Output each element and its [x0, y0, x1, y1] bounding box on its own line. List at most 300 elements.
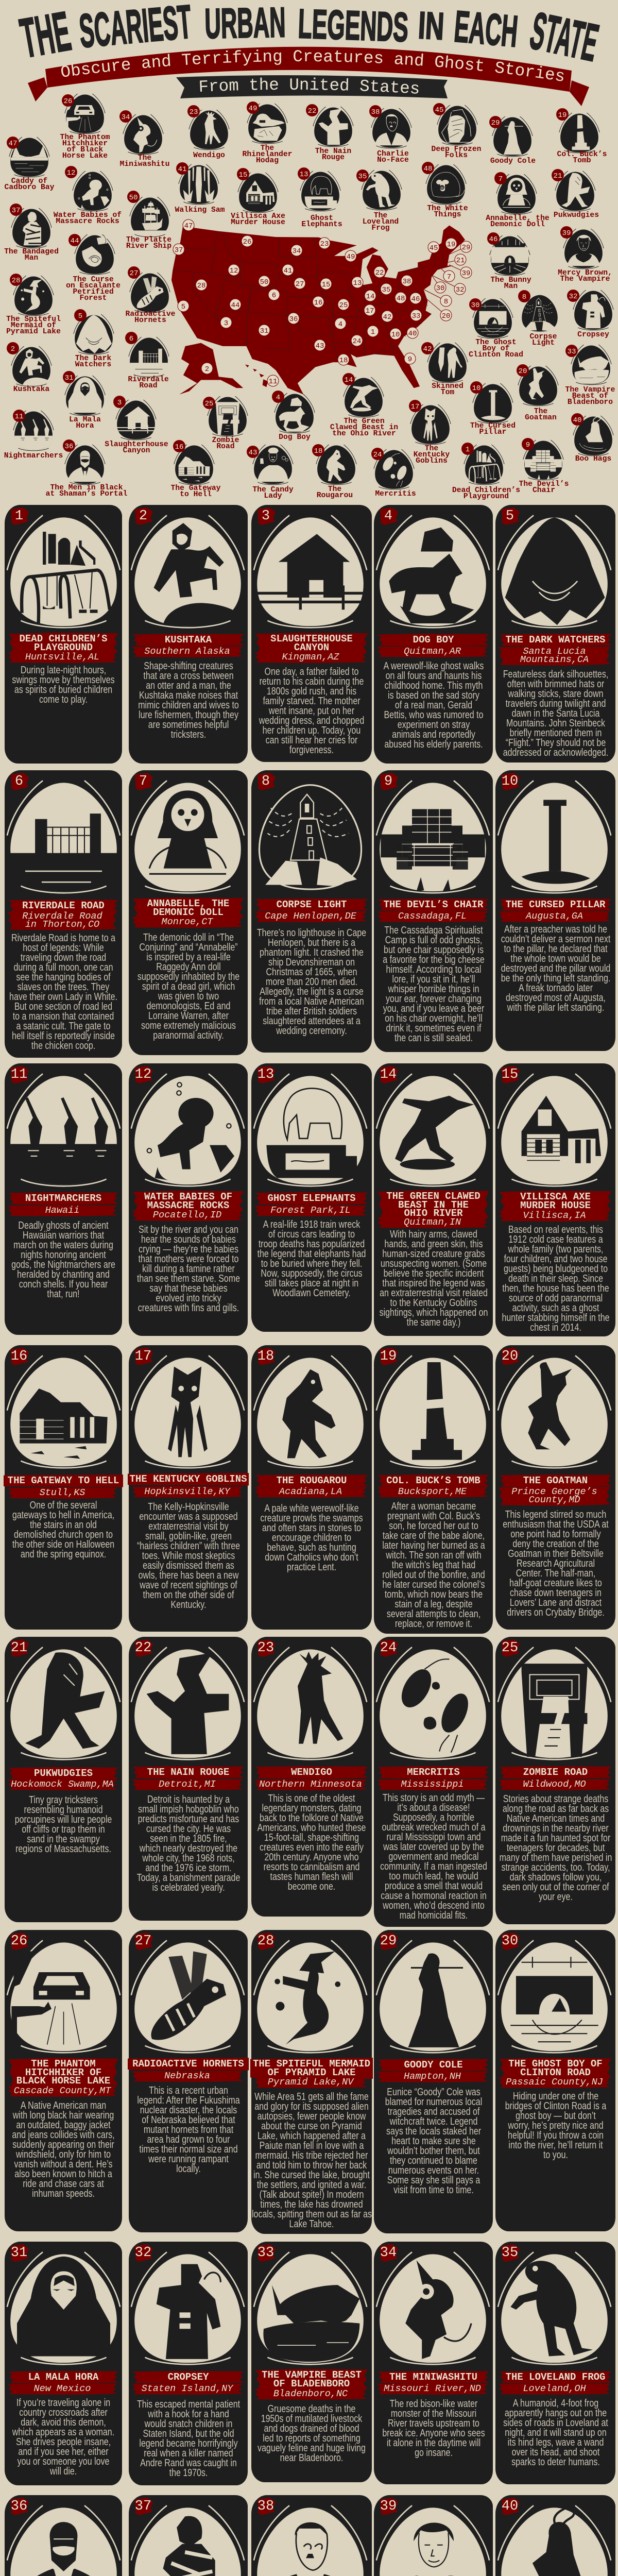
card 18: 18: [258, 1349, 274, 1364]
card 33: OF BLADENBORO: [273, 2378, 350, 2389]
mini: 35 Loveland Frog: Loveland: [363, 218, 399, 226]
mini: 7 Annabelle: Demonic Doll: [490, 221, 545, 229]
card 10: Augusta,GA: [526, 911, 583, 922]
card 28: and told him to throw her back: [256, 2160, 367, 2171]
card 4: experiment on stray: [397, 719, 470, 731]
card 11: march on the waters during: [13, 1240, 113, 1251]
mini: 17 Kentucky Goblins: Goblins: [416, 457, 448, 465]
mini: 25 Zombie Road: [203, 396, 248, 451]
mini: 43 Candy Lady: The Candy: [252, 486, 294, 494]
card 26: 26: [11, 1934, 27, 1949]
card 9: himself. According to local: [386, 963, 481, 975]
mini: 19 Col. Buck's Tomb: [556, 108, 607, 165]
map markers: 45: [430, 244, 438, 252]
card 13: of circus cars leading to: [268, 1228, 355, 1240]
card 15: guests) being bludgeoned to: [504, 1263, 607, 1275]
card 1: swings move by themselves: [12, 674, 115, 685]
card 18: and often stars in stories to: [262, 1522, 361, 1533]
card 10: [495, 770, 615, 1051]
card 9: but one chair supposedly is: [384, 944, 483, 955]
mini: 22 Nain Rouge: The Nain: [315, 147, 351, 156]
card 7: Raggedy Ann doll: [156, 961, 220, 973]
mini: 36 Men in Black: 36: [65, 443, 73, 451]
card 33: 1950s of mutilated livestock: [261, 2413, 362, 2425]
card 25: Stories about strange deaths: [503, 1793, 608, 1804]
mini: 39 Mercy Brown: [558, 226, 612, 283]
card 32: the 1970s.: [169, 2467, 208, 2478]
mini: 5 Dark Watchers: Watchers: [75, 361, 111, 369]
card 3: went insane, put on her: [269, 705, 354, 716]
mini: 47 Caddy: 47: [9, 140, 17, 148]
card 30: to you.: [543, 2149, 568, 2161]
card 15: MURDER HOUSE: [520, 1199, 591, 1211]
card 31: and if you see her, either: [18, 2446, 109, 2458]
card 28: THE SPITEFUL MERMAID: [253, 2058, 370, 2070]
card 15: VILLISCA AXE: [520, 1191, 591, 1202]
mini: 23 Wendigo: 23: [190, 108, 198, 116]
card 15: then, the house has been the: [502, 1283, 609, 1294]
mini: 11 Nightmarchers: [4, 410, 63, 460]
mini: 22 Nain Rouge: Rouge: [322, 154, 345, 162]
card 28: mermaid. His tribe rejected her: [255, 2149, 368, 2161]
card 31: [5, 2242, 122, 2485]
card 6: Riverdale Road is home to a: [11, 933, 115, 944]
card 27: 27: [135, 1934, 151, 1949]
card 19: he later cursed the colonel’s: [382, 1579, 485, 1590]
header and map illustration: [4, 0, 615, 501]
card 6: see the hanging bodies of: [16, 972, 111, 983]
mini: 9 Devil's Chair: The Devil’s: [519, 480, 569, 488]
card 14: With hairy arms, clawed: [390, 1228, 477, 1240]
mini: 30 Ghost Boy: [469, 298, 523, 359]
card 12: creatures with fins and gills.: [138, 1302, 239, 1314]
mini: 29 Goody Cole: [489, 116, 536, 165]
card 9: the can is still sealed.: [394, 1032, 473, 1044]
card 28: about the curse on Pyramid: [261, 2121, 362, 2132]
map markers: 1: [371, 328, 375, 336]
card 30: bridges of Clinton Road is a: [505, 2100, 606, 2111]
mini: 23 Wendigo: Wendigo: [193, 151, 225, 160]
card 15: four children, and two house: [504, 1253, 607, 1264]
mini: 26 Phantom Hitchhiker: of Black: [67, 146, 103, 154]
mini: 7 Annabelle: Annabelle, the: [486, 214, 550, 223]
card 17: Hopkinsville,KY: [144, 1486, 230, 1497]
card 14: sightings, which happened on: [379, 1307, 488, 1318]
card 13: GHOST ELEPHANTS: [267, 1193, 356, 1204]
card 10: destroyed most of Augusta,: [506, 992, 605, 1004]
card 22: 22: [135, 1640, 151, 1656]
card 22: whole city, the 1968 riots,: [142, 1853, 234, 1864]
mini: 30 Ghost Boy: Clinton Road: [469, 351, 523, 359]
card 3: return to his cabin during the: [260, 676, 364, 687]
card 7: 7: [139, 774, 147, 789]
card 23: back to the folklore of Native: [260, 1812, 364, 1824]
card 27: This is a recent urban: [149, 2084, 228, 2096]
card 10: After a preacher was told he: [504, 923, 607, 935]
mini: 35 Loveland Frog: The: [374, 212, 387, 220]
card 28: 28: [258, 1934, 274, 1949]
mini: 20 Goatman: 20: [519, 367, 527, 376]
card 12: 12: [135, 1067, 151, 1082]
map markers: 43: [316, 342, 324, 350]
card 12: kill during a famine rather: [142, 1263, 234, 1275]
map markers: 11: [269, 378, 277, 386]
mini: 1 Dead Children's Playground: 1: [466, 446, 470, 454]
card 1: During late-night hours,: [21, 665, 106, 676]
card 5: THE DARK WATCHERS: [506, 634, 605, 646]
mini: 48 White Things: 48: [424, 165, 432, 173]
card 16: demolished church open to: [14, 1529, 113, 1540]
card 32: legend became horrifyingly: [139, 2438, 237, 2449]
card 24: mad homicidal fits.: [399, 1909, 468, 1921]
card 22: is celebrated yearly.: [152, 1882, 225, 1893]
card 29: visit from time to time.: [393, 2184, 473, 2196]
mini: 9 Devil's Chair: 9: [526, 441, 530, 449]
map markers: 6: [272, 292, 276, 300]
mini: 36 Men in Black: The Men in Black: [50, 484, 123, 492]
card 21: porcupines will lure people: [15, 1814, 112, 1825]
card 38: 38: [258, 2499, 274, 2514]
card 14: believe the specific incident: [383, 1267, 484, 1279]
card 19: Bucksport,ME: [398, 1486, 467, 1497]
card 8: Henlopen, but there is a: [268, 937, 355, 948]
card 13: Woodlawn Cemetery.: [272, 1287, 351, 1298]
card 40: [495, 2495, 615, 2576]
card 6: traveling down the road: [21, 952, 106, 963]
card 29: Eunice “Goody” Cole was: [387, 2087, 480, 2098]
card 7: Conjuring” and “Annabelle”: [139, 942, 237, 953]
mini: 29 Goody Cole: 29: [491, 119, 500, 127]
card 13: A real-life 1918 train wreck: [263, 1219, 360, 1230]
card 15: 15: [502, 1067, 518, 1082]
mini: 48 White Things: Things: [434, 211, 461, 219]
card 18: encourage children to: [272, 1532, 351, 1544]
card 9: on his chair overnight, he’ll: [385, 1013, 482, 1024]
mini: 12 Water Babies: [54, 166, 122, 226]
card 23: creatures even into the early: [260, 1841, 364, 1853]
mini: 33 Vampire Beast: Beast of: [572, 392, 608, 400]
card 23: tastes human flesh will: [270, 1871, 353, 1883]
mini: 44 Escalante: Forest: [80, 294, 107, 302]
card 2: KUSHTAKA: [165, 634, 212, 646]
card 23: 20th century. Anyone who: [265, 1852, 358, 1863]
mini: 43 Candy Lady: 43: [249, 449, 257, 457]
card 29: numerous events on her.: [388, 2165, 479, 2176]
mini: 32 Cropsey: Cropsey: [577, 331, 609, 339]
mini: 30 Ghost Boy: Boy of: [483, 345, 510, 353]
card 12: say that these babies: [149, 1283, 227, 1294]
card 34: 34: [380, 2245, 397, 2261]
card 7: some extremely malicious: [141, 1020, 236, 1031]
card 22: and the 1976 ice storm.: [145, 1862, 231, 1873]
card 20: 20: [502, 1349, 518, 1364]
card 20: enthusiasm that the USDA at: [503, 1519, 608, 1530]
map markers: 34: [293, 247, 301, 256]
card 11: heralded by chanting and: [17, 1268, 110, 1280]
mini: 17 Kentucky Goblins: The: [425, 445, 438, 453]
mini: 18 Rougarou: [312, 444, 356, 500]
card 6: RIVERDALE ROAD: [22, 900, 105, 911]
mini: 31 La Mala Hora: 31: [65, 374, 73, 382]
card 29: they continued to blame: [390, 2155, 477, 2166]
card 24: community. If a man ingested: [380, 1861, 487, 1872]
card 18: behave, such as hunting: [267, 1541, 356, 1553]
card 12: Pocatello,ID: [153, 1210, 221, 1221]
card 9: 9: [384, 774, 392, 789]
mini: 50 Platte River Ship: The Platte: [126, 236, 171, 244]
mini: 20 Goatman: [517, 364, 558, 422]
card 5: addressed or acknowledged.: [503, 747, 608, 758]
card 35: sides of roads in Loveland at: [503, 2417, 608, 2429]
mini: 13 Ghost Elephants: [298, 167, 342, 229]
card 12: crying — they’re the babies: [139, 1244, 238, 1255]
card 11: gods, the Nightmarchers are: [11, 1259, 115, 1270]
card 16: One of the several: [30, 1499, 97, 1511]
mini: 5 Dark Watchers: The Dark: [75, 354, 111, 363]
card 4: DOG BOY: [413, 634, 454, 646]
card 7: The demonic doll in “The: [143, 931, 234, 943]
card 3: forgiveness.: [289, 744, 334, 755]
map markers: 16: [314, 299, 322, 307]
card 30: helpful! If you throw a coin: [508, 2130, 603, 2141]
mini: 31 La Mala Hora: La Mala: [69, 416, 101, 424]
card 18: A pale white werewolf-like: [264, 1502, 359, 1514]
mini: 15 Villisca: Villisca Axe: [231, 212, 285, 221]
card 28: times, the lake has drowned: [260, 2199, 363, 2210]
card 8: slaughtered attendees at a: [263, 1015, 360, 1026]
card 35: night, and it will stand up on: [505, 2427, 606, 2438]
title: [16, 0, 603, 73]
card 32: real when a killer named: [144, 2447, 233, 2459]
card 6: have their own Lady in White.: [9, 991, 117, 1003]
card 2: 2: [139, 509, 147, 524]
card 14: hands, and green skin, this: [384, 1239, 483, 1250]
card 12: [129, 1063, 248, 1336]
mini: 15 Villisca: [231, 168, 285, 227]
map markers: 49: [347, 253, 355, 261]
card 20: County,MD: [529, 1495, 580, 1505]
card 26: BLACK HORSE LAKE: [16, 2075, 110, 2087]
mini: 19 Col. Buck's Tomb: Tomb: [573, 157, 591, 165]
card 14: human-sized creature grabs: [382, 1248, 485, 1259]
card 31: LA MALA HORA: [28, 2371, 98, 2383]
mini: 19 Col. Buck's Tomb: 19: [558, 111, 566, 120]
card 17: THE KENTUCKY GOBLINS: [129, 1473, 247, 1485]
card 21: regions of Massachusetts.: [15, 1843, 111, 1855]
card 17: owls, there has been a new: [138, 1569, 238, 1581]
mini: 14 Green Clawed Beast: 14: [345, 376, 353, 384]
mini: 20 Goatman: Goatman: [525, 414, 557, 422]
card 6: But one section of road led: [14, 1001, 112, 1012]
map markers: 23: [320, 240, 329, 248]
card 18: THE ROUGAROU: [277, 1475, 347, 1486]
map markers: 33: [412, 312, 420, 320]
mini: 40 Boo Hags: [571, 413, 613, 463]
mini: 48 White Things: [422, 162, 468, 219]
mini: 12 Water Babies: 12: [67, 169, 75, 177]
mini: 44 Escalante: 44: [71, 237, 79, 245]
card 21: resembling humanoid: [24, 1804, 102, 1816]
card 28: Paiute man fell in love with a: [260, 2140, 364, 2151]
card 31: you or someone you love: [18, 2455, 109, 2467]
map markers: 19: [447, 241, 455, 249]
card 6: slaves on the trees. They: [18, 981, 109, 992]
card 21: [5, 1637, 122, 1922]
card 5: Mountains,CA: [520, 654, 589, 665]
card 39: [374, 2495, 493, 2576]
card 14: an extraterrestrial visit related: [380, 1287, 487, 1298]
mini: 22 Nain Rouge: [306, 104, 353, 162]
card 6: to a mansion that contained: [13, 1011, 114, 1022]
card 17: The Kelly-Hopkinsville: [148, 1501, 229, 1513]
card 34: monster of the Missouri: [390, 2408, 476, 2419]
card 27: [129, 1930, 248, 2232]
card 29: heart to make sure she: [391, 2135, 475, 2146]
card 15: Villisca,IA: [523, 1210, 586, 1221]
card 11: Deadly ghosts of ancient: [18, 1220, 109, 1231]
card 15: source of odd paranormal: [508, 1292, 603, 1303]
card 23: WENDIGO: [291, 1767, 332, 1778]
card 34: Missouri River,ND: [384, 2383, 481, 2394]
mini: 37 Bandaged Man: [4, 204, 59, 262]
card 35: 35: [502, 2245, 518, 2261]
card 2: an otter and a man, the: [146, 680, 231, 691]
card 27: Nebraska: [164, 2071, 210, 2081]
card 10: be the only thing left standing.: [501, 973, 610, 984]
map markers: 26: [243, 238, 251, 246]
mini: 31 La Mala Hora: Hora: [76, 422, 94, 430]
card 29: wouldn’t bother them, but: [387, 2145, 479, 2157]
card 19: later having her burned as a: [382, 1539, 485, 1551]
card 36: 36: [11, 2499, 27, 2514]
card 9: whisper horrible things in: [388, 983, 479, 994]
card 33: [251, 2242, 372, 2482]
mini: 42 Skinned Tom: Skinned: [432, 382, 464, 391]
card 4: of a real man, Gerald: [394, 700, 472, 711]
card 7: is inspired by a real-life: [146, 951, 230, 962]
card 29: witchcraft twice. Legend: [389, 2115, 477, 2127]
card 18: Acadiana,LA: [279, 1486, 342, 1497]
card 11: Hawaiian warriors that: [23, 1229, 104, 1241]
card 23: [251, 1637, 372, 1917]
card 20: Lovers’ Lane and distract: [509, 1597, 602, 1608]
card 33: vaguely feline and huge living: [258, 2442, 366, 2453]
card 16: gateways to hell in America,: [12, 1510, 114, 1521]
mini: 13 Ghost Elephants: 13: [300, 171, 308, 179]
card 22: Detroit is haunted by a: [147, 1794, 230, 1805]
card 30: THE GHOST BOY OF: [508, 2058, 603, 2070]
card 11: NIGHTMARCHERS: [25, 1193, 101, 1204]
card 26: inhuman speeds.: [32, 2188, 95, 2199]
card 29: [374, 1930, 493, 2233]
card 11: that, run!: [47, 1288, 80, 1299]
mini: 43 Candy Lady: [247, 445, 294, 500]
card 29: blamed for numerous local: [385, 2096, 482, 2107]
card 28: in. She cursed the lake, brought: [253, 2169, 370, 2180]
card 35: its hind legs, wave a wand: [507, 2437, 604, 2448]
card 27: legend: After the Fukushima: [137, 2095, 239, 2106]
mini: 41 Walking Sam: [175, 162, 225, 214]
mini: 28 Spiteful Mermaid: 28: [12, 277, 20, 285]
card 10: to the pillar, he declared that: [504, 943, 607, 954]
card 20: Prince George’s: [511, 1486, 597, 1497]
card 33: and dogs drained of blood: [264, 2422, 359, 2434]
mini: 40 Boo Hags: Boo Hags: [575, 455, 611, 463]
card 13: the legend that elephants had: [258, 1248, 366, 1259]
card 34: The red bison-like water: [389, 2398, 477, 2409]
mini: 49 Hodag: The: [261, 144, 274, 152]
mini: 8 Corpse Light: Corpse: [530, 333, 557, 341]
card 28: Lake Tahoe.: [289, 2218, 334, 2230]
card 25: strange accidents, too. Today,: [501, 1862, 610, 1873]
mini: 28 Spiteful Mermaid: [6, 274, 61, 336]
card 9: a favorite for the big cheese: [383, 954, 484, 965]
mini: 6 Riverdale Road: Riverdale: [128, 376, 169, 384]
card 9: lore, if you sit in it, he’ll: [392, 974, 475, 985]
map markers: 20: [442, 312, 450, 320]
card 21: sand in the swampy: [27, 1833, 100, 1844]
card 22: small impish hobgoblin who: [138, 1803, 238, 1815]
card 13: troop deaths has popularized: [259, 1239, 365, 1250]
card 33: 33: [258, 2245, 274, 2261]
card 22: predicts misfortune and has: [138, 1814, 239, 1825]
card 1: come to play.: [39, 693, 88, 705]
card 16: [5, 1345, 122, 1630]
card 17: extraterrestrial visit by: [148, 1521, 228, 1532]
card 23: Americans, who hunted these: [258, 1822, 366, 1833]
card 27: locally.: [176, 2163, 200, 2174]
card 2: lure fishermen, though they: [139, 709, 238, 720]
card 19: 19: [380, 1349, 397, 1364]
mini: 15 Villisca: 15: [239, 171, 247, 179]
map markers: 29: [462, 244, 470, 252]
card 30: into the river, he’ll return it: [508, 2139, 603, 2150]
card 3: One day, a father failed to: [265, 666, 358, 677]
mini: 5 Dark Watchers: [74, 309, 114, 369]
mini: 44 Escalante: on Escalante: [66, 282, 121, 290]
card 20: chase down teenagers in: [510, 1587, 601, 1598]
mini: 16 Gateway to Hell: 16: [175, 443, 183, 451]
card 26: vanish without a dent. He’s: [14, 2159, 112, 2170]
card 33: near Bladenboro.: [280, 2452, 343, 2464]
card 27: nuclear disaster, the locals: [140, 2104, 237, 2115]
card 18: [251, 1345, 372, 1630]
mini: 14 Green Clawed Beast: Clawed Beast in: [330, 423, 398, 432]
card 34: it alone in the daytime will: [386, 2437, 480, 2448]
card 13: still takes place at night in: [265, 1278, 358, 1289]
card 34: THE MINIWASHITU: [389, 2371, 477, 2383]
mini: 41 Walking Sam: Walking Sam: [175, 206, 225, 214]
mini: 44 Escalante: [66, 234, 121, 302]
card 8: There’s no lighthouse in Cape: [257, 927, 366, 939]
card 14: to the Kentucky Goblins: [390, 1297, 477, 1309]
card 24: produce a smell that would: [384, 1880, 483, 1892]
card 31: which appears as a woman.: [12, 2427, 114, 2438]
card 5: briefly mentioned them in: [509, 727, 602, 739]
mini: 24 Mercritis: 24: [373, 451, 382, 459]
card 10: couldn’t deliver a sermon next: [501, 934, 610, 945]
card 20: half-goat creature likes to: [509, 1578, 602, 1589]
card 8: from a local Native American: [259, 995, 364, 1007]
mini: 16 Gateway to Hell: to Hell: [180, 490, 212, 499]
card 34: break ice. Anyone who sees: [382, 2428, 485, 2439]
map markers: 50: [260, 278, 268, 286]
card 6: in Thorton,CO: [25, 919, 99, 930]
mini: 21 Pukwudgies: [552, 169, 599, 219]
mini: 12 Water Babies: Massacre Rocks: [56, 217, 119, 226]
map markers: 3: [224, 319, 228, 328]
card 25: many of them have perished in: [499, 1852, 612, 1863]
